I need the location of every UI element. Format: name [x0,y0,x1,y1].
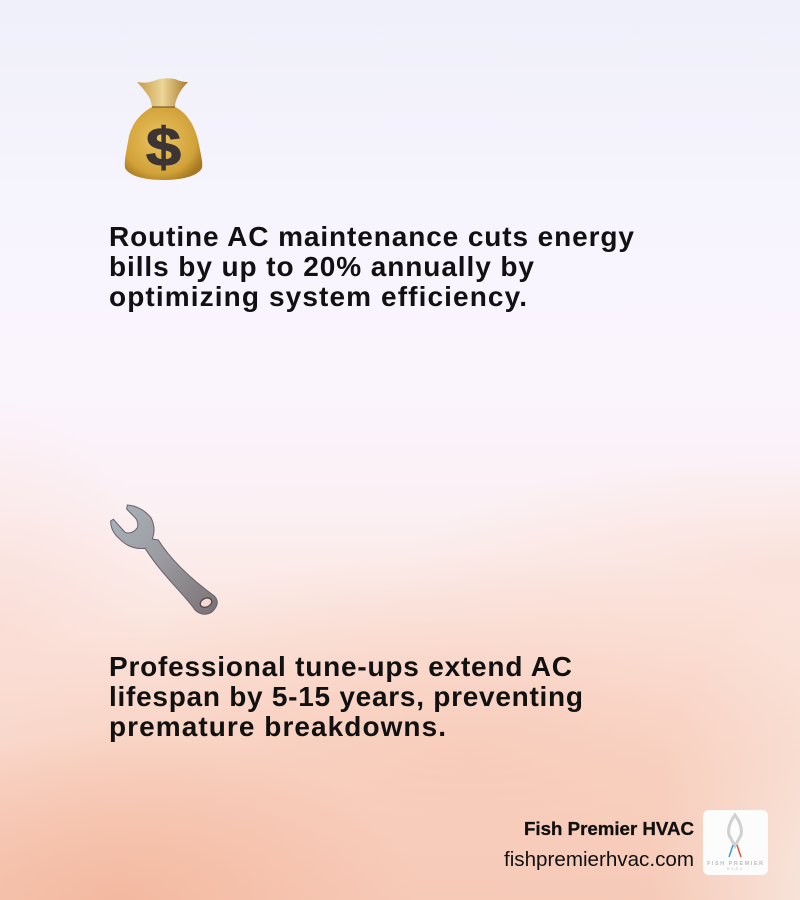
footer: brand name and website: fishpremierhvac.com [504,849,694,871]
text: energy savings statement: bills by up to 20% annually by [109,251,534,282]
logo: Fish Premier HVAC: HVAC [727,867,744,871]
footer: brand name and website [504,819,694,871]
text: lifespan statement: lifespan by 5-15 years, preventing [109,681,583,712]
text: energy savings statement [109,221,634,312]
logo: Fish Premier HVAC: FISH PREMIER [707,861,763,867]
text: energy savings statement: Routine AC maintenance cuts energy [109,221,634,252]
icon: wrench [111,505,217,614]
text: lifespan statement: premature breakdowns. [109,711,446,742]
logo: Fish Premier HVAC [703,810,768,875]
text: energy savings statement: optimizing system efficiency. [109,281,527,312]
icon: money bag [125,78,202,180]
icon: money bag: $ [146,116,181,178]
footer: brand name and website: Fish Premier HVAC [524,819,694,839]
text: lifespan statement: Professional tune-ups extend AC [109,651,572,682]
text: lifespan statement [109,651,583,742]
